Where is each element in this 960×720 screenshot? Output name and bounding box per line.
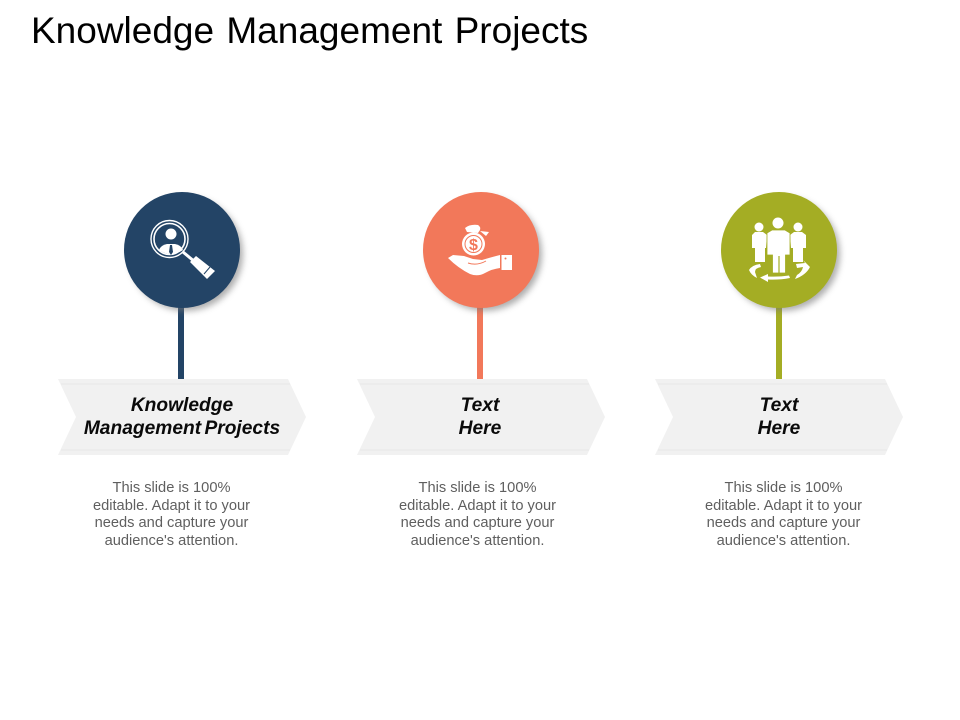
text block: middle description: needs and capture your xyxy=(401,515,554,531)
text block: middle description: This slide is 100% xyxy=(418,480,536,496)
stem 2 xyxy=(477,300,483,379)
text block: middle description: editable. Adapt it to your xyxy=(399,498,556,514)
heading: text here right xyxy=(758,395,800,438)
panel: knowledge management projects graphic xyxy=(58,192,306,455)
icon: hand holding money bag xyxy=(448,225,512,275)
text block: left description: needs and capture your xyxy=(95,515,248,531)
text block: left description xyxy=(93,480,250,549)
circle 2 xyxy=(423,192,539,308)
circle shadow 1 xyxy=(129,197,243,311)
text block: middle description: audience's attention. xyxy=(411,533,544,549)
text block: right description: editable. Adapt it to your xyxy=(705,498,862,514)
circle 3 xyxy=(721,192,837,308)
text block: right description: audience's attention. xyxy=(717,533,850,549)
text block: right description xyxy=(705,480,862,549)
chevron 3 xyxy=(655,379,903,455)
stem 1 xyxy=(178,300,184,379)
heading: text here middle xyxy=(459,395,501,438)
circle shadow 2 xyxy=(428,197,542,311)
text block: middle description xyxy=(399,480,556,549)
icon: magnifier with person xyxy=(151,220,215,279)
text block: left description: This slide is 100% xyxy=(112,480,230,496)
heading: knowledge management projects xyxy=(84,395,280,438)
heading: knowledge management projects: Knowledge xyxy=(131,395,233,416)
heading: text here right: Here xyxy=(758,418,800,438)
text block: left description: audience's attention. xyxy=(105,533,238,549)
panel: text here middle graphic xyxy=(357,192,605,455)
heading: text here right: Text xyxy=(760,395,798,416)
icon: hand holding money bag: $ xyxy=(469,237,478,254)
title: Knowledge Management Projects xyxy=(31,10,588,50)
heading: text here middle: Here xyxy=(459,418,501,438)
text block: left description: editable. Adapt it to your xyxy=(93,498,250,514)
chevron 1 xyxy=(58,379,306,455)
stem 3 xyxy=(776,300,782,379)
heading: knowledge management projects: Management Projects xyxy=(84,418,280,438)
text block: right description: needs and capture your xyxy=(707,515,860,531)
circle 1 xyxy=(124,192,240,308)
text block: right description: This slide is 100% xyxy=(724,480,842,496)
panel: text here right graphic xyxy=(655,192,903,455)
heading: text here middle: Text xyxy=(461,395,499,416)
icon: team of three people with arrows xyxy=(749,218,810,282)
circle shadow 3 xyxy=(726,197,840,311)
chevron 2 xyxy=(357,379,605,455)
